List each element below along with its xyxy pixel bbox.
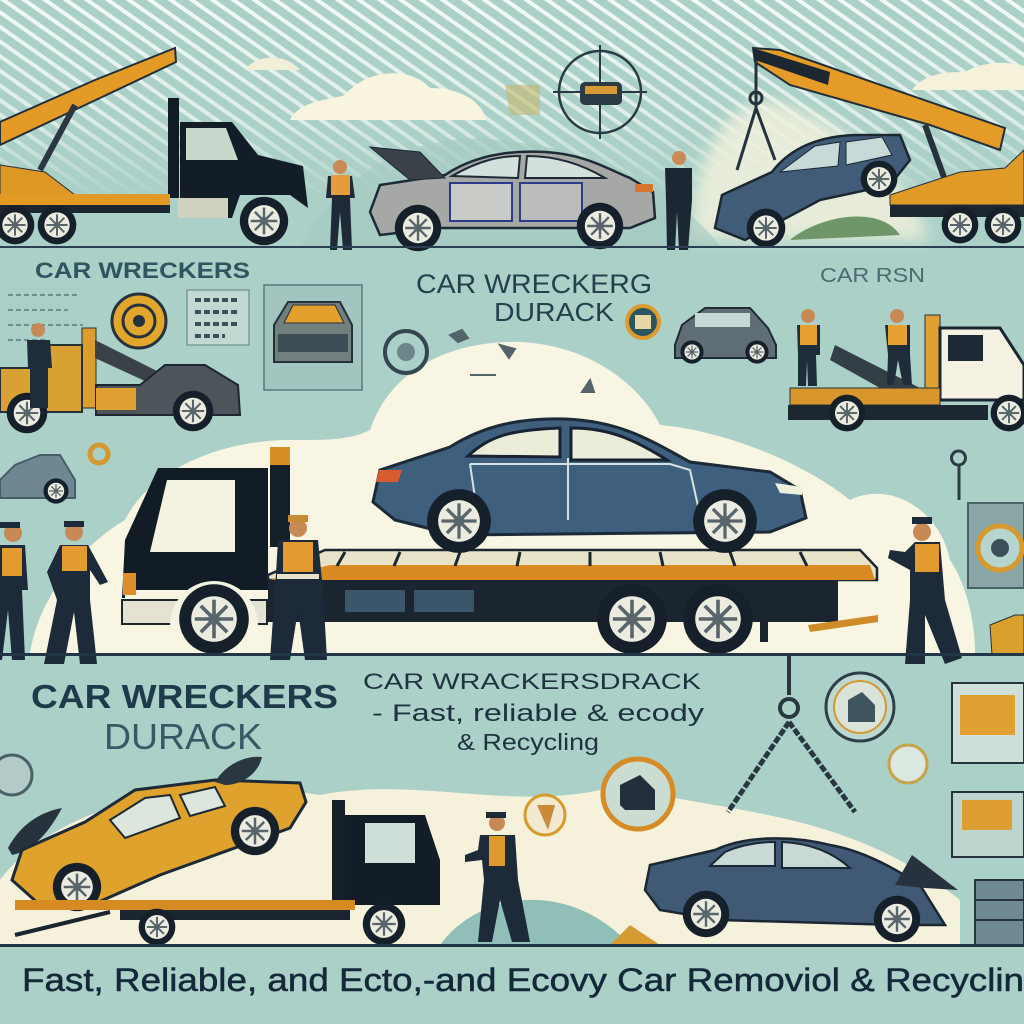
worker on cab [270,515,327,660]
chart scribbles left [8,295,83,340]
icon: small ring [889,745,927,783]
panel: middle scene [0,258,1024,664]
text: recycling line: & Recycling [457,729,599,755]
main truck cab [122,447,290,624]
right card stack [952,683,1024,857]
divider bottom [0,944,1024,947]
cloud right [912,63,1024,90]
right crane truck [737,48,1024,243]
right machine card [968,503,1024,588]
yellow part [990,615,1024,655]
heading: durack small: DURACK [494,297,615,327]
heading: car wreckers small: CAR WRECKERS [35,258,250,283]
icon: badge orange [603,759,673,829]
blue wrecked car [645,838,958,942]
icon: small gold badge [525,795,565,835]
worker left [44,521,108,664]
worker [326,160,355,250]
heading: car wrackersdrack: CAR WRACKERSDRACK [363,669,701,694]
worker right [888,517,962,664]
left yellow tow truck [0,328,240,433]
green mound [790,216,900,240]
worker [27,323,52,408]
tilted blue car [715,135,910,247]
heading: durack large: DURACK [104,716,262,757]
distant hills [300,138,720,246]
data card [187,290,249,345]
cloud centre [290,73,487,120]
icon: crosshair target [553,45,647,139]
small faded car [0,455,75,504]
main truck wheels [170,581,753,654]
cream cloud [30,342,975,653]
panel: bottom scene [0,656,1024,945]
cloud small [245,58,300,70]
bottom slogan: Fast, Reliable, and Ecto,-and Ecovy Car Removiol & Recyclin [22,962,1024,998]
text: fast reliable line: - Fast, reliable & ecody [372,700,704,727]
small dark car [675,308,776,364]
worker [465,812,530,942]
divider mid [0,653,1024,656]
right machine [975,880,1024,945]
left dark fin [8,808,62,855]
small flatbed truck [15,800,440,945]
icon: orange badge [627,306,659,338]
yellow tilted car [12,757,306,911]
key icon [952,451,966,500]
heading: car rsn: CAR RSN [820,265,925,287]
top cream glow [690,100,930,240]
icon: ring [385,331,427,373]
icon: circle badge [826,673,894,741]
main flatbed [268,550,878,642]
teal mound [440,900,630,945]
car front card [264,285,362,390]
right white tow truck [788,315,1024,431]
heading: car wreckerg: CAR WRECKERG [416,269,652,299]
left tow truck [0,48,308,245]
divider top [0,246,1024,248]
small parts [450,330,594,392]
worker [797,309,820,386]
panel: top scene [0,45,1024,251]
icon: gold medallion [112,294,166,348]
silver wrecked car [370,147,655,251]
worker [665,151,692,250]
main blue car [373,419,806,553]
debris [610,925,660,945]
worker far left [0,522,28,660]
hanging chain hook [728,656,855,812]
cream ground [0,785,960,945]
worker [885,309,912,385]
icon: small orange ring [90,445,108,463]
faded icon [505,85,540,115]
heading: car wreckers large: CAR WRECKERS [31,678,338,715]
left side icon [0,755,32,795]
diagonal hatch sky [0,0,1024,200]
